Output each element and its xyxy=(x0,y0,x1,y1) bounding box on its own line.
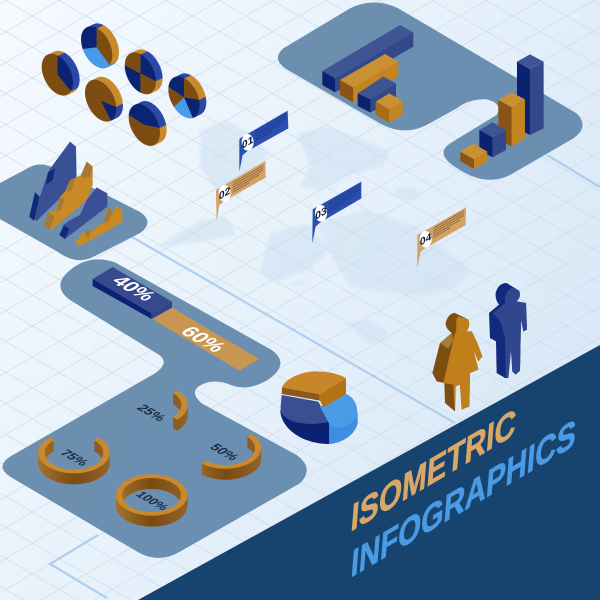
split bar 40 / 60: 60% xyxy=(175,323,231,355)
ring 75%: 75% xyxy=(57,447,93,468)
area chart: tall blue xyxy=(29,142,77,221)
pie chart 5 xyxy=(129,95,167,152)
callout 01 xyxy=(239,111,288,172)
map callouts xyxy=(216,111,466,268)
ring 25%: 25% xyxy=(133,402,170,423)
title band xyxy=(138,345,600,600)
panel: percent charts backdrop xyxy=(2,259,307,558)
panel: area charts backdrop xyxy=(0,164,148,260)
ring 100% xyxy=(119,476,184,525)
split bar 40 / 60: 40% xyxy=(106,273,160,304)
percent charts xyxy=(41,267,259,525)
area chart: small orange xyxy=(75,206,122,246)
ring 100%: 100% xyxy=(132,489,172,512)
area chart: lower blue xyxy=(59,187,107,239)
ring 25% xyxy=(133,392,185,429)
callout 01: 01 xyxy=(242,134,253,152)
pie chart 2 xyxy=(42,44,80,102)
pie charts group xyxy=(42,17,206,152)
ring 50%: 50% xyxy=(206,442,243,463)
ring 50% xyxy=(203,435,258,478)
callout 02: 02 xyxy=(219,185,230,203)
world map xyxy=(155,120,470,343)
horizontal bar chart xyxy=(322,25,413,123)
callout 04 xyxy=(417,207,466,268)
bar charts xyxy=(322,25,544,169)
pie chart 6 xyxy=(168,67,206,125)
icon: man xyxy=(489,283,527,378)
pie chart 3 xyxy=(85,70,123,128)
figures xyxy=(432,283,527,411)
pie chart 1 xyxy=(81,17,119,75)
area chart: tall orange xyxy=(44,162,93,230)
panel: bar charts backdrop xyxy=(278,2,583,180)
title: ISOMETRIC: ISOMETRIC xyxy=(349,400,518,540)
area charts xyxy=(29,142,122,246)
ring 75% xyxy=(41,439,106,482)
split bar 40 / 60 xyxy=(93,267,259,371)
callout 04: 04 xyxy=(420,231,432,249)
3D exploded pie chart xyxy=(280,371,358,444)
callout 03: 03 xyxy=(315,205,327,223)
callout 03 xyxy=(312,182,361,243)
icon: woman xyxy=(432,313,482,411)
callout 02 xyxy=(216,161,266,222)
pie chart 4 xyxy=(125,43,163,101)
vertical bar chart xyxy=(460,54,544,169)
